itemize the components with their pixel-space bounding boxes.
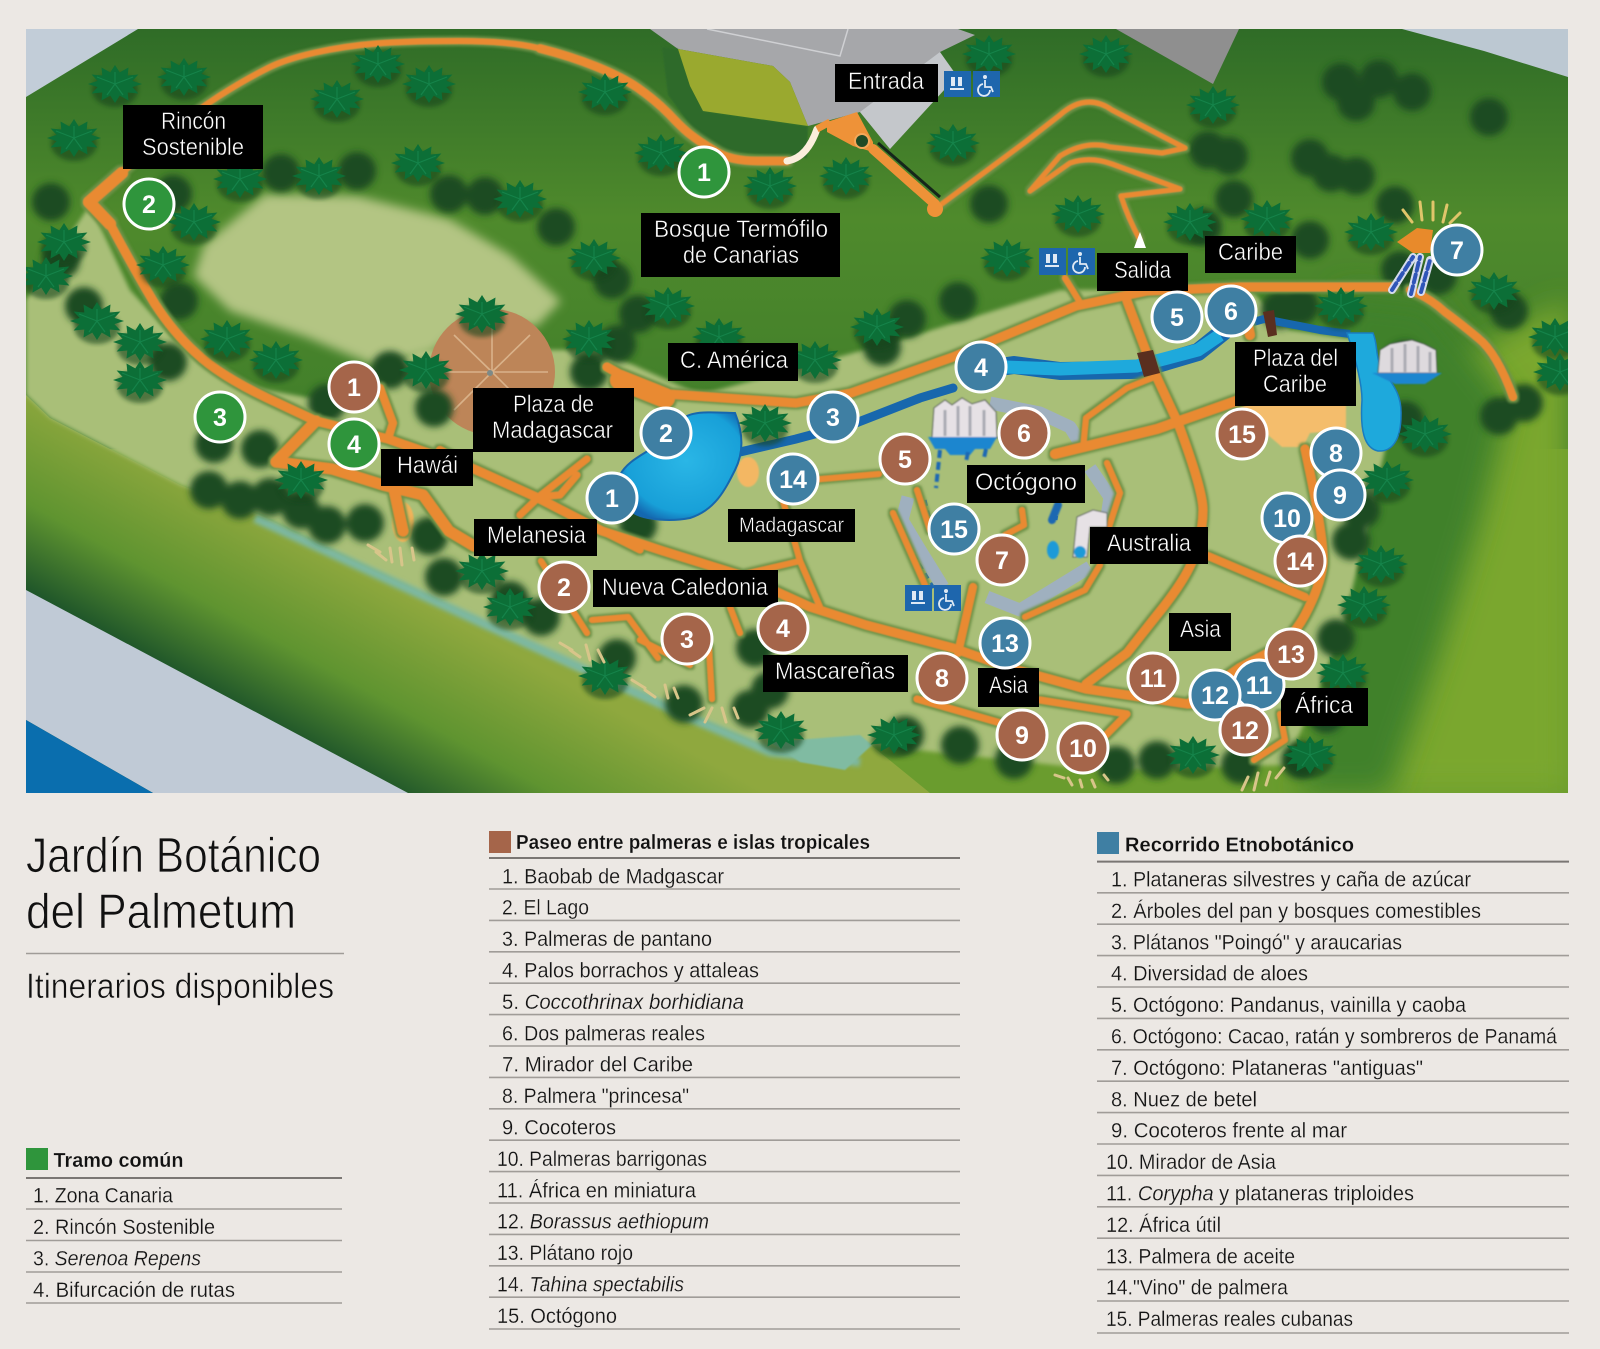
label: C. América: C. América [680,347,789,374]
list Recorrido: 5. Octógono: Pandanus, vainilla y caoba [1111,994,1466,1017]
swatch green [26,1148,48,1170]
label: Rincón Sostenible [123,105,263,169]
marker blue 8: 8 [1329,440,1343,468]
list Recorrido: 11. Corypha y plataneras triploides [1106,1182,1414,1206]
list Paseo: 6. Dos palmeras reales [502,1022,705,1045]
map markers: Tramo común (green) [124,147,729,469]
legend: Tramo común [26,1148,342,1303]
garden map [19,29,1587,793]
list Tramo común: 2. Rincón Sostenible [33,1216,215,1239]
label: Nueva Caledonia: Nueva Caledonia [602,574,769,601]
marker brown 9 [997,710,1047,760]
label: Asia south: Asia [989,672,1029,699]
marker brown 10 [1058,723,1108,773]
marker blue 11 [1234,660,1284,710]
lower lawn [26,395,930,793]
label: C. América [668,343,798,381]
label: África [1281,688,1368,726]
list Paseo: 5. Coccothrinax borhidiana [502,991,744,1014]
list Paseo: 1. Baobab de Madgascar [502,865,724,888]
service icons: entrance [944,71,1000,97]
viewpoint fans [368,202,1460,790]
list Recorrido: 4. Diversidad de aloes [1111,963,1308,986]
marker green 4 [329,419,379,469]
dark trees [32,60,1543,784]
channel strip [255,518,860,762]
list Recorrido: 1. Plataneras silvestres y caña de azúcar [1111,868,1471,892]
list Tramo común: 3. Serenoa Repens [33,1248,201,1270]
label: Hawái [381,449,473,486]
corner sky right [1402,29,1568,77]
list Paseo: 7. Mirador del Caribe [502,1054,693,1077]
marker blue 12 [1190,670,1240,720]
label: Plaza del Caribe [1235,342,1356,406]
pale garden area [26,205,1385,770]
service icons: exit [1039,248,1095,275]
list Paseo [489,865,960,1329]
marker brown 3: 3 [680,626,694,654]
marker blue 14 [768,454,818,504]
label: Australia [1090,527,1208,564]
octagon blue water edges [899,500,1058,590]
marker brown 11: 11 [1140,665,1166,693]
list Recorrido: 12. África útil [1106,1214,1221,1237]
car park building [650,29,975,149]
label: Entrada [835,64,938,102]
waterfall [1392,257,1430,294]
map markers: Paseo entre palmeras (brown) [329,362,1325,773]
plaza terracotta circle [429,309,555,435]
entrance plaza [787,112,1146,248]
marker green 3: 3 [213,404,227,432]
marker brown 6: 6 [1017,420,1031,448]
swatch blue [1097,832,1119,854]
marker brown 14: 14 [1286,548,1314,576]
label: Asia north: Asia [1180,616,1222,643]
map labels [123,64,1368,726]
marker brown 13 [1266,629,1316,679]
marker brown 8 [917,653,967,703]
title [26,829,321,939]
label: Mascareñas: Mascareñas [775,658,895,685]
list Recorrido: 2. Árboles del pan y bosques comestibles [1111,900,1481,923]
label: Plaza de Madagascar: Plaza de [513,391,594,418]
label: Bosque Termófilo de Canarias: de Canarias [683,242,799,269]
marker blue 13 [980,618,1030,668]
heading Paseo: Paseo entre palmeras e islas tropicales [516,832,870,854]
marker brown 2: 2 [557,574,571,602]
label: Nueva Caledonia [593,570,778,607]
marker brown 12 [1220,705,1270,755]
dark band round parking [662,47,808,158]
marker green 1 [679,147,729,197]
list Paseo: 2. El Lago [502,897,589,920]
list Recorrido: 13. Palmera de aceite [1106,1245,1295,1268]
marker blue 13: 13 [991,630,1019,658]
list Recorrido: 10. Mirador de Asia [1106,1151,1276,1174]
marker brown 4 [758,603,808,653]
marker green 4: 4 [347,431,361,459]
marker brown 3 [662,614,712,664]
list Paseo: 4. Palos borrachos y attaleas [502,960,759,982]
marker brown 15 [1217,409,1267,459]
building right [1116,29,1239,84]
pale oval lawn [194,194,561,367]
palm trees [19,35,1587,778]
sand plazas [392,400,1346,542]
parking green [678,49,808,126]
marker blue 15: 15 [940,516,968,544]
list Paseo: 15. Octógono [497,1305,617,1328]
mirador orange blob [1397,228,1433,253]
list Recorrido: 3. Plátanos "Poingó" y araucarias [1111,931,1402,954]
glass domes [928,340,1442,559]
marker blue 15 [929,504,979,554]
list Recorrido: 9. Cocoteros frente al mar [1111,1120,1347,1143]
marker brown 10: 10 [1069,735,1097,763]
marker brown 4: 4 [776,615,790,643]
list Recorrido: 8. Nuez de betel [1111,1088,1257,1111]
road band [26,590,408,793]
title: Jardín Botánico [26,829,321,883]
water: lake and river [618,319,1401,520]
label: Plaza del Caribe: Caribe [1263,371,1327,398]
marker brown 15: 15 [1228,421,1256,449]
octagon walkway [902,403,1110,610]
legend: Paseo entre palmeras e islas tropicales [489,831,960,1329]
heading Tramo común: Tramo común [54,1150,184,1172]
label: Rincón Sostenible: Sostenible [142,134,244,161]
marker green 3 [195,392,245,442]
marker blue 12: 12 [1201,682,1229,710]
dome east [1047,505,1107,559]
marker brown 9: 9 [1015,722,1029,750]
heading Recorrido: Recorrido Etnobotánico [1125,834,1354,856]
list Paseo: 12. Borassus aethiopum [497,1211,709,1234]
marker blue 7: 7 [1450,237,1464,265]
label: Plaza de Madagascar [473,388,634,452]
marker brown 6 [999,408,1049,458]
marker blue 9: 9 [1333,482,1347,510]
marker blue 5: 5 [1170,304,1184,332]
list Paseo: 14. Tahina spectabilis [497,1274,684,1296]
label: Caribe: Caribe [1218,239,1283,266]
list Paseo: 11. África en miniatura [497,1179,696,1202]
list Recorrido: 15. Palmeras reales cubanas [1106,1308,1353,1331]
label: Melanesia: Melanesia [487,522,587,549]
sea [26,720,153,793]
marker blue 4: 4 [974,354,988,382]
swatch brown [489,831,511,853]
marker brown 1 [329,362,379,412]
title: del Palmetum [26,885,296,939]
label: Madagascar: Madagascar [739,514,844,537]
marker green 2: 2 [142,191,156,219]
label: Australia: Australia [1107,530,1192,557]
list Recorrido [1097,868,1569,1333]
map terrain [26,29,1568,793]
marker blue 3 [808,392,858,442]
marker blue 10 [1262,493,1312,543]
label: Salida: Salida [1114,257,1172,284]
list Tramo común: 1. Zona Canaria [33,1185,173,1208]
marker blue 6 [1206,286,1256,336]
marker brown 12: 12 [1231,717,1259,745]
marker blue 11: 11 [1246,672,1272,700]
label: Entrada: Entrada [848,68,925,95]
list Recorrido: 6. Octógono: Cacao, ratán y sombreros de Panamá [1111,1026,1557,1048]
marker blue 14: 14 [779,466,807,494]
label: Asia north [1169,613,1231,651]
label: Bosque Termófilo de Canarias [641,213,840,277]
label: Hawái: Hawái [397,452,458,479]
list Paseo: 3. Palmeras de pantano [502,928,712,951]
list Tramo común [26,1185,342,1303]
marker brown 1: 1 [347,374,361,402]
marker green 1: 1 [697,159,711,187]
orange paths [89,41,1513,760]
label: Octógono [967,465,1085,503]
subtitle: Itinerarios disponibles [26,967,334,1006]
marker blue 2: 2 [659,420,673,448]
list Tramo común: 4. Bifurcación de rutas [33,1279,235,1302]
list Recorrido: 14."Vino" de palmera [1106,1277,1288,1300]
list Paseo: 9. Cocoteros [502,1116,616,1140]
marker blue 10: 10 [1273,505,1301,533]
marker blue 3: 3 [826,404,840,432]
marker blue 6: 6 [1224,298,1238,326]
marker brown 2 [539,562,589,612]
map markers: Recorrido Etnobotánico (blue) [587,225,1482,720]
label: Caribe [1205,236,1296,273]
marker blue 5 [1152,292,1202,342]
label: Mascareñas [763,655,908,692]
label: Rincón Sostenible: Rincón [161,108,226,135]
label: Plaza de Madagascar: Madagascar [492,417,613,444]
label: Plaza del Caribe: Plaza del [1253,345,1338,372]
list Paseo: 8. Palmera "princesa" [502,1085,689,1108]
list Paseo: 10. Palmeras barrigonas [497,1148,707,1171]
marker blue 1 [587,473,637,523]
marker blue 4 [956,342,1006,392]
label: Salida [1097,253,1188,291]
list Recorrido: 7. Octógono: Plataneras "antiguas" [1111,1057,1423,1080]
marker blue 9 [1315,470,1365,520]
marker brown 7 [977,535,1027,585]
marker brown 5: 5 [898,446,912,474]
marker green 2 [124,179,174,229]
marker blue 8 [1311,428,1361,478]
car park lighter apron [860,52,957,149]
marker brown 8: 8 [935,665,949,693]
marker blue 7 [1432,225,1482,275]
label: Bosque Termófilo de Canarias: Bosque Termófilo [654,216,828,243]
label: Asia south [978,668,1039,707]
label: Madagascar [728,509,855,542]
dome caribe [1372,340,1442,384]
marker brown 14 [1275,536,1325,586]
marker blue 2 [641,408,691,458]
list Paseo: 13. Plátano rojo [497,1242,633,1265]
service icons: octagon [905,585,961,611]
bridges [1137,310,1277,377]
label: Octógono: Octógono [975,469,1077,496]
corner sky [26,29,138,97]
label: África: África [1295,692,1354,719]
legend: Recorrido Etnobotánico [1097,832,1569,1333]
marker brown 5 [880,434,930,484]
marker brown 11 [1128,653,1178,703]
label: Melanesia [474,519,597,556]
dome north [928,398,997,488]
marker blue 1: 1 [605,485,619,513]
marker brown 7: 7 [995,547,1009,575]
marker brown 13: 13 [1277,641,1305,669]
